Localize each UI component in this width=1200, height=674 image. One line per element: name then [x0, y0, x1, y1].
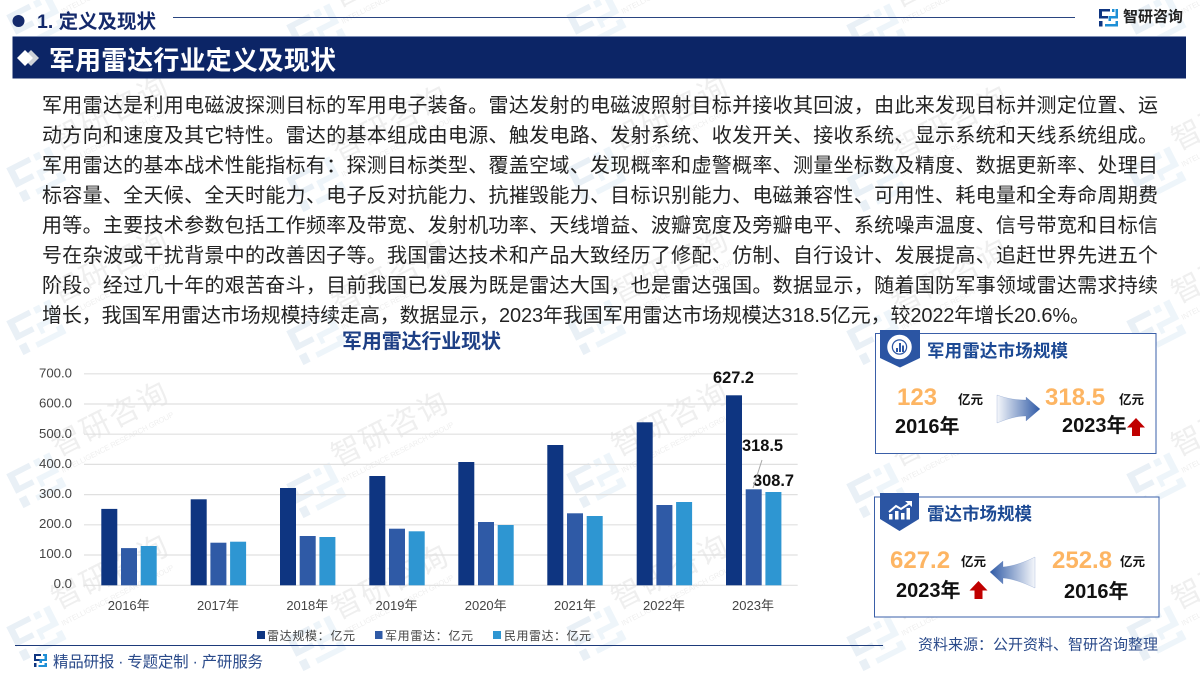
body text block: 号在杂波或干扰背景中的改善因子等。我国雷达技术和产品大致经历了修配、仿制、自行设计、发展提高、追赶世界先进五个 — [42, 244, 1158, 267]
y axis labels: 100.0 — [39, 546, 72, 561]
icon: red up arrow — [1127, 418, 1145, 436]
panel: military radar market size: 2016年 — [895, 415, 960, 438]
body text block — [42, 94, 1158, 327]
source note: 资料来源：公开资料、智研咨询整理 — [918, 636, 1158, 654]
arrow: right — [997, 395, 1040, 423]
panel: military radar market size: 亿元 — [1119, 392, 1144, 407]
panel: military radar market size: 123 — [897, 384, 937, 411]
y axis labels: 700.0 — [39, 366, 72, 380]
x axis labels: 2019年 — [376, 598, 417, 613]
panel: radar market size: 亿元 — [1120, 554, 1146, 569]
panel: military radar market size: 318.5 — [1045, 384, 1105, 411]
section heading — [12, 10, 1075, 33]
section heading: 1. 定义及现状 — [37, 10, 156, 33]
y axis labels: 500.0 — [39, 426, 72, 441]
icon: donut chart badge — [880, 330, 920, 368]
data labels — [713, 369, 794, 490]
series: radar total — [101, 395, 742, 585]
x axis labels: 2016年 — [108, 598, 150, 613]
data labels: 627.2 — [713, 369, 754, 387]
arrow: left — [990, 557, 1035, 588]
panel: radar market size: 雷达市场规模 — [927, 504, 1032, 524]
panel: military radar market size: 亿元 — [958, 392, 984, 407]
panel: radar market size: 2016年 — [1064, 580, 1128, 603]
y axis labels — [39, 366, 72, 591]
icon: trend chart badge — [880, 493, 919, 531]
panel: radar market size: 252.8 — [1052, 547, 1112, 574]
x axis labels — [108, 598, 774, 613]
chart legend: 雷达规模：亿元 — [267, 628, 355, 643]
logo: brand top right: 智研咨询 — [1123, 8, 1183, 26]
x axis labels: 2022年 — [643, 598, 685, 613]
x axis labels: 2017年 — [197, 598, 239, 613]
x axis labels: 2023年 — [732, 598, 774, 613]
panel: radar market size: 627.2 — [890, 547, 950, 574]
icon: red up arrow — [970, 581, 988, 599]
panel: military radar market size — [876, 330, 1156, 454]
y axis labels: 400.0 — [39, 456, 72, 471]
panel: radar market size: 亿元 — [961, 554, 987, 569]
x axis labels: 2020年 — [465, 598, 507, 613]
bar chart: radar market size — [39, 366, 798, 613]
title banner — [12, 36, 1186, 78]
y axis labels: 0.0 — [54, 576, 72, 591]
y axis labels: 600.0 — [39, 396, 72, 410]
data labels: 318.5 — [742, 437, 783, 455]
panel: radar market size — [874, 493, 1159, 617]
series: military radar — [121, 489, 762, 585]
panel: military radar market size: 军用雷达市场规模 — [927, 341, 1068, 361]
panel: radar market size: 2023年 — [896, 579, 960, 602]
x axis labels: 2021年 — [554, 598, 596, 613]
y axis labels: 300.0 — [39, 486, 72, 501]
body text block: 用等。主要技术参数包括工作频率及带宽、发射机功率、天线增益、波瓣宽度及旁瓣电平、系统噪声温度、信号带宽和目标信 — [42, 214, 1158, 237]
body text block: 阶段。经过几十年的艰苦奋斗，目前我国已发展为既是雷达大国，也是雷达强国。数据显示，随着国防军事领域雷达需求持续 — [42, 274, 1158, 297]
x axis labels: 2018年 — [286, 598, 328, 613]
body text block: 动方向和速度及其它特性。雷达的基本组成由电源、触发电路、发射系统、收发开关、接收系统、显示系统和天线系统组成。 — [42, 124, 1158, 147]
series: civil radar — [141, 492, 781, 585]
body text block: 增长，我国军用雷达市场规模持续走高，数据显示，2023年我国军用雷达市场规模达318.5亿元，较2022年增长20.6%。 — [42, 304, 1090, 327]
body text block: 军用雷达是利用电磁波探测目标的军用电子装备。雷达发射的电磁波照射目标并接收其回波，由此来发现目标并测定位置、运 — [42, 94, 1158, 117]
footer tagline: 精品研报 · 专题定制 · 产研服务 — [53, 653, 263, 671]
logo: brand top right — [1099, 8, 1183, 26]
body text block: 标容量、全天候、全天时能力、电子反对抗能力、抗摧毁能力、目标识别能力、电磁兼容性、可用性、耗电量和全寿命周期费 — [42, 184, 1158, 207]
chart legend: 军用雷达：亿元 — [385, 628, 473, 643]
chart legend — [257, 628, 591, 643]
title banner: 军用雷达行业定义及现状 — [49, 46, 336, 76]
panel: military radar market size: 2023年 — [1062, 414, 1126, 437]
body text block: 军用雷达的基本战术性能指标有：探测目标类型、覆盖空域、发现概率和虚警概率、测量坐标数及精度、数据更新率、处理目 — [42, 154, 1158, 177]
y axis labels: 200.0 — [39, 516, 72, 531]
data labels: 308.7 — [753, 472, 794, 490]
chart legend: 民用雷达：亿元 — [504, 628, 591, 643]
chart title: 军用雷达行业现状 — [342, 330, 501, 353]
